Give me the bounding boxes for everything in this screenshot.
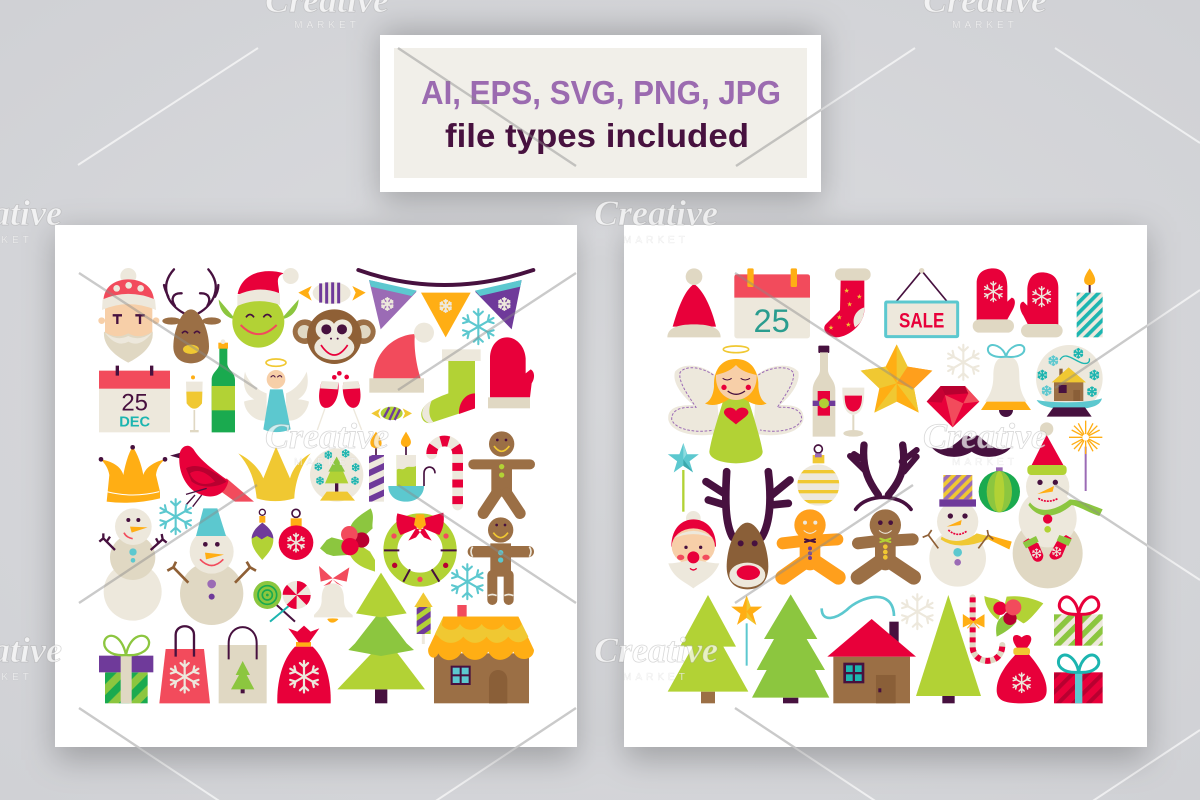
icon: gingerbread house bbox=[428, 605, 534, 703]
watermark: Creative Market logos: MARKET bbox=[623, 672, 689, 683]
icon: wine bottle bbox=[813, 346, 835, 437]
heading: file types included: file types included bbox=[445, 117, 749, 154]
icon: red sack bbox=[997, 635, 1047, 703]
icon: tree snow globe bbox=[310, 448, 363, 502]
icon: antler headband bbox=[850, 445, 917, 509]
icon: striped teal candle bbox=[1077, 268, 1103, 337]
icon: red diamond bbox=[927, 386, 979, 427]
icon: teal snowflake bbox=[450, 564, 485, 599]
icon: sale sign: SALE bbox=[899, 308, 944, 332]
icon: red mitten bbox=[488, 337, 534, 408]
icon: snowman with branch arms bbox=[99, 508, 167, 621]
icon: sparkler bbox=[1069, 421, 1102, 491]
icon: teal snowflake bbox=[158, 499, 193, 534]
icon: calendar 25 dec bbox=[99, 366, 170, 432]
diagonal watermark lines bbox=[78, 47, 1147, 747]
panel: left icon set bbox=[55, 225, 577, 747]
icon: purple and lime ornament bbox=[252, 509, 273, 560]
icon: toasting glasses bbox=[317, 371, 362, 430]
icon: gift with teal bow bbox=[1054, 655, 1103, 703]
panel: right icon set bbox=[624, 225, 1147, 747]
icon: red roof house bbox=[827, 619, 916, 703]
icon: wine glass bbox=[842, 388, 864, 437]
icon: bunting banner bbox=[358, 270, 533, 337]
icon: gold star bbox=[861, 344, 932, 413]
icon: orange crown bbox=[99, 445, 167, 503]
icon: green fir tree bbox=[752, 594, 829, 703]
watermark: Creative Market logos: Creative bbox=[594, 193, 718, 233]
icon: sale sign bbox=[886, 268, 958, 337]
watermark: Creative Market logos: MARKET bbox=[294, 20, 360, 31]
watermark: Creative Market logos: Creative bbox=[923, 416, 1047, 456]
icon: cream bell with teal bow bbox=[981, 345, 1031, 417]
panel: file types badge bbox=[380, 35, 821, 192]
icon: wreath with bow bbox=[384, 513, 457, 582]
icon: striped candy bbox=[298, 282, 366, 304]
icon: tan shopping bag with tree bbox=[219, 627, 267, 703]
watermark: Creative Market logos bbox=[0, 0, 1047, 683]
icon: green stocking bbox=[421, 349, 481, 423]
icon: gift box with lime bow bbox=[99, 636, 153, 703]
icon: coral santa hat bbox=[369, 323, 434, 393]
icon: yellow crown bbox=[238, 447, 311, 501]
icon: gold star wand bbox=[731, 595, 762, 666]
icon: big snowman with santa hat bbox=[1013, 422, 1103, 588]
icon: brown gingerbread man bbox=[858, 509, 914, 577]
icon: champagne flute bbox=[186, 375, 203, 432]
icon: gingerbread man bbox=[473, 431, 530, 513]
icon: elf head bbox=[219, 268, 299, 348]
icon: firework rocket bbox=[414, 592, 433, 644]
icon: green candle in holder bbox=[388, 432, 435, 502]
icon: angel bbox=[244, 359, 309, 432]
icon: snowman with teal hat bbox=[167, 508, 256, 625]
icon: lime tree with brown trunk bbox=[668, 595, 748, 703]
icon: small candy bbox=[371, 407, 412, 420]
icon: holly with berries bbox=[320, 508, 375, 572]
icon: red cardinal bird bbox=[170, 446, 254, 507]
heading: file formats: AI, EPS, SVG, PNG, JPG bbox=[421, 74, 781, 111]
icon: reindeer head bbox=[162, 269, 221, 363]
icon: teal star wand bbox=[668, 443, 699, 512]
watermark: Creative Market logos: MARKET bbox=[294, 457, 360, 468]
icon: monkey head bbox=[293, 309, 376, 364]
icon: snowman with top hat bbox=[923, 475, 1012, 587]
icon: bell with coral bow bbox=[314, 566, 353, 623]
icon: three tier fir tree bbox=[337, 573, 425, 703]
icon: reindeer with red nose bbox=[706, 472, 790, 589]
icon: santa head bbox=[98, 268, 159, 363]
watermark: Creative Market logos: MARKET bbox=[952, 457, 1018, 468]
icon: pair of mittens bbox=[973, 268, 1063, 337]
icon: coral shopping bag bbox=[159, 626, 210, 703]
icon: cream snowflake bbox=[946, 345, 981, 380]
icon: calendar 25: 25 bbox=[754, 302, 790, 339]
watermark: Creative Market logos: MARKET bbox=[623, 235, 689, 246]
icon: chimney smoke bbox=[822, 597, 894, 618]
icon: candy cane bbox=[432, 441, 458, 505]
icon: candy cane with bow bbox=[963, 597, 1002, 661]
icon: red stocking with stars bbox=[824, 268, 871, 337]
icon: gift with red bow bbox=[1054, 597, 1103, 646]
icon: calendar 25 bbox=[734, 268, 810, 339]
icon: red hat bbox=[667, 268, 721, 337]
icon: gingerbread man with teal buttons bbox=[471, 517, 531, 600]
icon: angel girl bbox=[668, 346, 803, 463]
icon: green bauble bbox=[979, 467, 1020, 512]
icon: moustache bbox=[931, 436, 1012, 457]
icon: purple striped candle bbox=[369, 432, 384, 502]
icon: santa face bbox=[668, 511, 719, 588]
watermark: Creative Market logos: MARKET bbox=[952, 20, 1018, 31]
icon: champagne bottle bbox=[212, 339, 235, 432]
icon: lime triangle tree bbox=[916, 595, 981, 703]
icon: striped bauble bbox=[797, 445, 839, 506]
icon: calendar 25 dec: 25 bbox=[121, 390, 148, 417]
watermark: Creative Market logos: Creative bbox=[594, 630, 718, 670]
icon: house snow globe bbox=[1036, 345, 1103, 417]
icon: red sack with snowflake bbox=[277, 626, 331, 703]
icon: holly berries bbox=[984, 596, 1043, 637]
icon: teal snowflake bbox=[461, 309, 496, 344]
icon: lollipops bbox=[253, 581, 311, 622]
watermark: Creative Market logos: Creative bbox=[265, 416, 389, 456]
icon: orange gingerbread man bbox=[783, 509, 838, 577]
icon: red ornament bbox=[279, 509, 313, 560]
icon: calendar 25 dec: DEC bbox=[119, 415, 151, 431]
icon: cream snowflake bbox=[900, 594, 935, 629]
